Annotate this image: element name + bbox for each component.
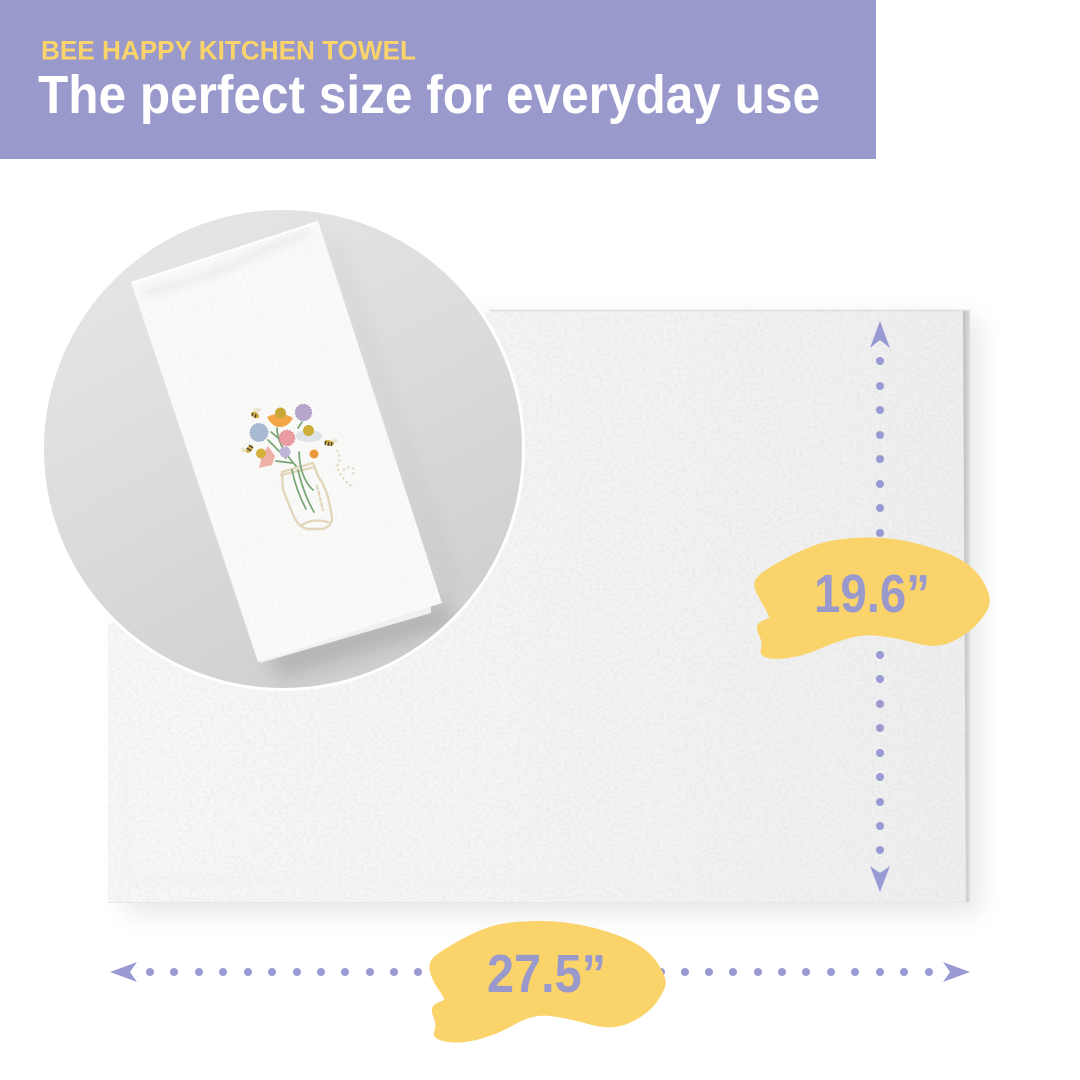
pink and yellow flower [256, 446, 275, 468]
embroidery: flowers in a jar with bees [240, 404, 354, 529]
height value: 19.6” [814, 564, 930, 624]
white daisy [296, 425, 322, 442]
bee 1 [250, 408, 261, 418]
flat towel photo [108, 310, 980, 914]
folded towel [131, 221, 442, 663]
dotted bee trail [337, 450, 354, 488]
header banner [0, 0, 876, 159]
width value: 27.5” [487, 944, 606, 1004]
inset photo circle: folded towel [42, 208, 524, 690]
stems [268, 422, 314, 512]
small orange bud [310, 450, 318, 458]
width dimension arrow [110, 962, 970, 982]
eyebrow heading: BEE HAPPY KITCHEN TOWEL [41, 36, 416, 66]
callout: height 19.6 inches [754, 537, 990, 659]
lavender flower [280, 446, 290, 458]
purple flower [295, 404, 312, 421]
bee 3 [323, 438, 338, 447]
callout: width 27.5 inches [429, 921, 666, 1043]
title: The perfect size for everyday use [38, 65, 820, 125]
pink flower [279, 430, 295, 446]
blue flower [250, 424, 268, 442]
jar [281, 463, 332, 529]
bee 2 [240, 444, 254, 453]
orange coneflower [267, 408, 293, 427]
height dimension arrow [870, 321, 890, 892]
